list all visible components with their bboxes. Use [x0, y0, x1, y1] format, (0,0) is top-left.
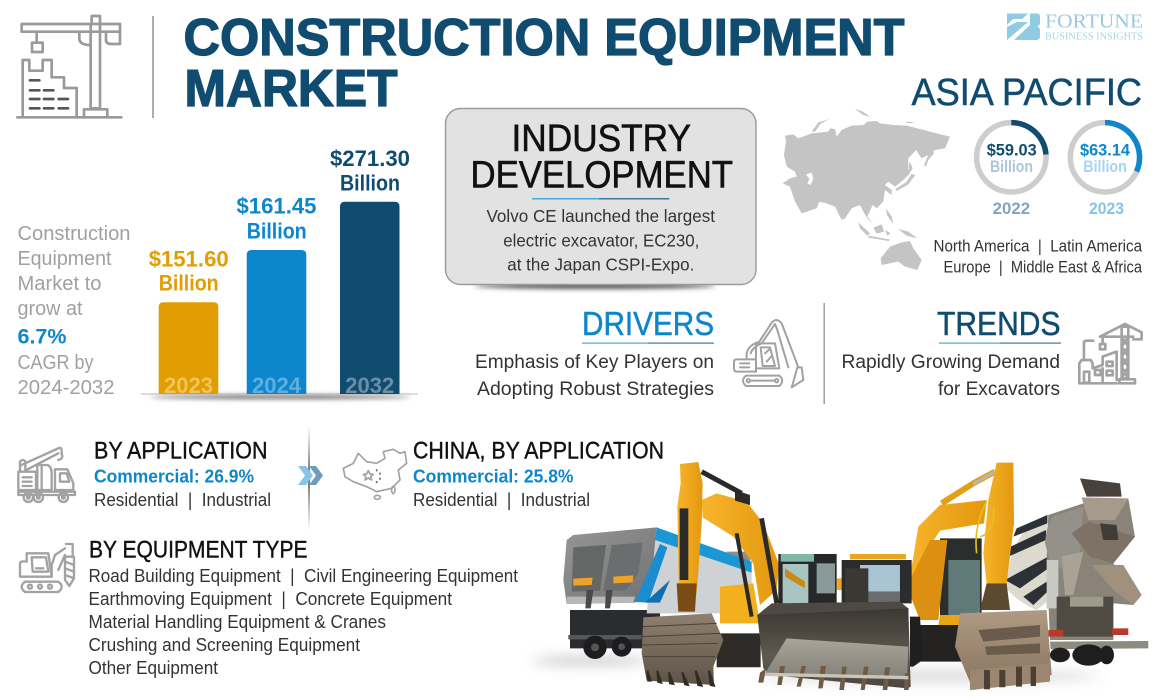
trends block: for Excavators — [938, 379, 1060, 400]
other regions: North America | Latin America — [934, 238, 1143, 256]
drivers block: Emphasis of Key Players on — [475, 352, 714, 373]
map: Asia Pacific — [783, 109, 950, 270]
bar 2032: 2032 — [345, 373, 394, 398]
donut: 2022: Billion — [990, 157, 1033, 176]
icon: excavator — [734, 320, 803, 387]
panel text: Volvo CE launched the largest — [486, 206, 715, 226]
bar 2023: 2023 — [164, 373, 213, 398]
CAGR text — [18, 223, 130, 399]
CAGR text: grow at — [18, 298, 83, 320]
title: CONSTRUCTION EQUIPMENT — [184, 9, 905, 67]
icon: crane truck — [18, 448, 75, 502]
heading: Asia Pacific: ASIA PACIFIC — [912, 72, 1142, 114]
construction machinery illustration — [532, 462, 1148, 690]
bar 2023: Billion — [159, 271, 219, 296]
CAGR text: 6.7% — [18, 326, 67, 348]
trends block: TRENDS — [937, 305, 1060, 342]
icon: china map — [343, 449, 407, 499]
drivers block: Adopting Robust Strategies — [477, 379, 714, 400]
title divider — [152, 16, 154, 118]
panel: industry development — [446, 108, 756, 289]
drivers block — [475, 305, 714, 400]
by application text — [94, 437, 271, 510]
by application text: BY APPLICATION — [94, 437, 268, 464]
drivers block: DRIVERS — [582, 305, 714, 342]
logo: Fortune Business Insights: FORTUNE — [1045, 10, 1143, 32]
logo: Fortune Business Insights: BUSINESS INSIGHTS — [1045, 32, 1143, 42]
CAGR text: Equipment — [18, 248, 112, 270]
china by application text: Commercial: 25.8% — [413, 465, 574, 486]
dump truck — [563, 527, 752, 659]
by equipment type text — [88, 536, 518, 678]
trends block: Rapidly Growing Demand — [842, 352, 1060, 373]
by equipment type text: Other Equipment — [88, 658, 218, 678]
donut: 2023: 2023 — [1089, 200, 1124, 218]
by application text: Residential | Industrial — [94, 490, 271, 510]
icon: factory and crane — [1079, 324, 1142, 383]
excavator right — [907, 463, 1052, 690]
panel heading: INDUSTRY — [512, 118, 691, 160]
trends block — [842, 305, 1061, 400]
panel text — [486, 206, 715, 275]
bar 2032 — [330, 146, 410, 398]
china by application text — [413, 437, 664, 510]
wheel loader with cab — [757, 554, 923, 690]
donut: 2023 — [1070, 123, 1140, 218]
panel heading: DEVELOPMENT — [470, 154, 733, 196]
other regions — [934, 238, 1143, 277]
concrete mixer truck — [1003, 478, 1148, 666]
by equipment type text: Earthmoving Equipment | Concrete Equipment — [88, 589, 452, 609]
icon: crane and building — [17, 16, 121, 117]
bar 2032: $271.30 — [330, 146, 410, 171]
donut: 2023: $63.14 — [1080, 140, 1131, 160]
donut: 2022: 2022 — [993, 200, 1030, 218]
bar 2024: Billion — [247, 218, 307, 244]
bar 2024: $161.45 — [236, 194, 316, 219]
CAGR text: Construction — [18, 223, 130, 245]
bar 2032: Billion — [340, 170, 400, 196]
china by application text: CHINA, BY APPLICATION — [413, 437, 664, 464]
ground shadow — [532, 657, 1100, 683]
CAGR text: Market to — [18, 273, 102, 295]
bar 2024: 2024 — [252, 373, 302, 398]
panel text: electric excavator, EC230, — [503, 231, 699, 251]
title — [184, 9, 905, 118]
by equipment type text: Crushing and Screening Equipment — [88, 635, 360, 655]
donut: 2022: $59.03 — [987, 140, 1037, 160]
divider with shadow — [308, 425, 310, 530]
excavator left — [642, 462, 779, 686]
CAGR text: 2024-2032 — [18, 377, 115, 399]
by application text: Commercial: 26.9% — [94, 465, 254, 486]
by equipment type text: Material Handling Equipment & Cranes — [88, 612, 386, 632]
bar chart — [141, 146, 418, 399]
china by application text: Residential | Industrial — [413, 490, 590, 510]
bar 2023: $151.60 — [149, 247, 229, 272]
arrow: chevrons — [298, 466, 323, 485]
vertical divider — [824, 303, 825, 404]
bar 2024 — [236, 194, 316, 398]
donut: 2023: Billion — [1083, 157, 1127, 176]
title: MARKET — [184, 60, 398, 118]
bar 2023 — [149, 247, 229, 398]
CAGR text: CAGR by — [18, 352, 94, 374]
panel text: at the Japan CSPI-Expo. — [507, 255, 694, 275]
by equipment type text: Road Building Equipment | Civil Engineering Equipment — [88, 566, 518, 586]
icon: drilling rig — [20, 544, 74, 592]
donut: 2022 — [977, 123, 1046, 218]
by equipment type text: BY EQUIPMENT TYPE — [89, 536, 308, 563]
panel heading — [470, 118, 733, 196]
logo: Fortune Business Insights — [1007, 10, 1143, 42]
